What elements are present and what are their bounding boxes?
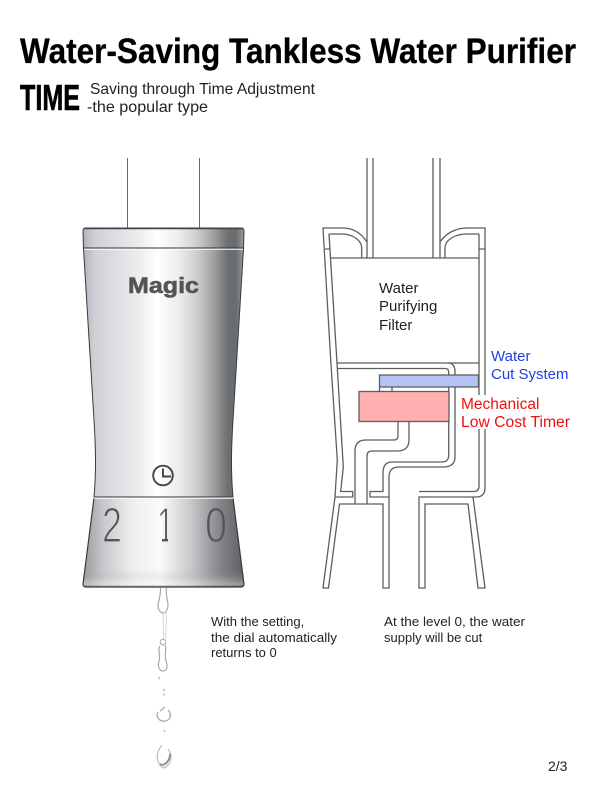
label: mechanical low cost timer with white backing: Mechanical [461,396,539,413]
caption: water cut at level 0: At the level 0, the water [384,614,526,629]
timer outlet tube [355,387,409,504]
dial numbers [104,508,225,542]
caption: water cut at level 0 [384,614,526,645]
housing shoulders and walls [323,228,485,588]
water stream and drops [157,588,171,768]
caption: dial return: With the setting, [211,614,304,629]
label: water purifying filter [379,280,437,334]
subtitle keyword TIME: TIME [20,77,80,118]
label: mechanical low cost timer with white backing: Low Cost Timer [461,414,570,431]
dial numbers: 2 [102,499,122,553]
caption: water cut at level 0: supply will be cut [384,630,483,645]
filter chamber lines [330,258,479,497]
upper body [83,228,244,497]
mechanical timer block [359,392,449,422]
water cut system block [380,375,478,387]
subtitle text [87,81,316,116]
label: water cut system: Water [491,348,530,365]
caption: dial return: returns to 0 [211,645,277,660]
label: water purifying filter: Water [379,280,418,297]
label: water purifying filter: Filter [379,317,412,334]
label: water cut system [491,348,569,383]
dial ring [83,497,244,587]
cross-section diagram [323,158,485,588]
inlet tubes [367,158,440,258]
label: water purifying filter: Purifying [379,298,437,315]
caption: dial return [211,614,338,660]
icon: clock [153,466,173,485]
subtitle text: -the popular type [87,99,208,116]
inlet pipes [128,158,200,228]
collar groove [84,248,243,249]
brand logo: Magic [128,273,199,298]
label: water cut system: Cut System [491,366,569,383]
subtitle text: Saving through Time Adjustment [90,81,316,98]
dial numbers: 1 [157,499,174,553]
dial numbers: 0 [205,499,227,553]
label: mechanical low cost timer with white backing [459,395,570,431]
product illustration: purifier exterior [83,158,244,768]
page number: 2/3 [548,758,568,774]
caption: dial return: the dial automatically [211,630,338,645]
